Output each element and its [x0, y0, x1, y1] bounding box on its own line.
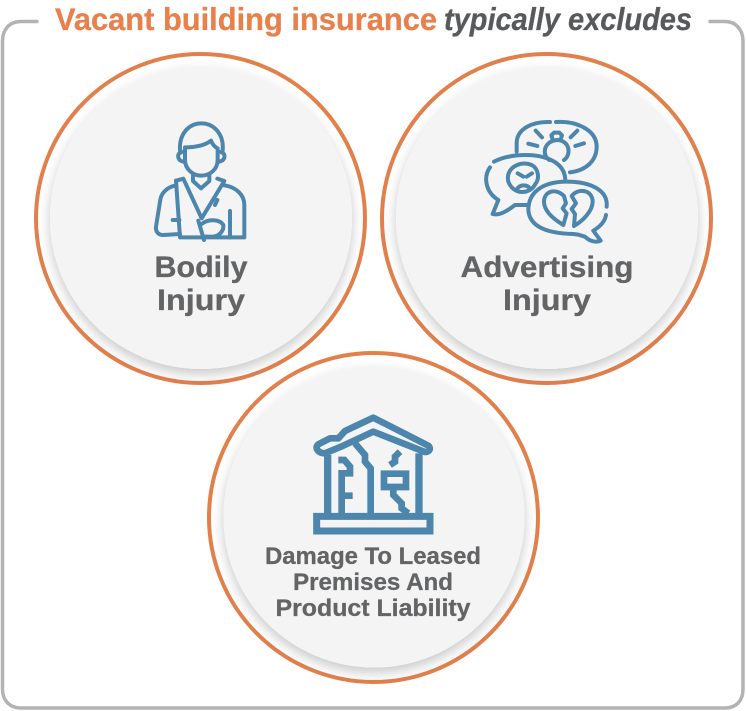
label: Damage To Leased Premises And Product Liability [265, 543, 481, 622]
outer ring [36, 54, 365, 383]
panel: advertising injury [382, 54, 711, 383]
title: Vacant building insurance [55, 1, 437, 37]
icon: speech bubbles with ring, angry face and broken heart [486, 122, 607, 242]
outer ring [382, 54, 711, 383]
outer ring [209, 353, 538, 682]
label: Damage To Leased Premises And Product Liability: Premises And [293, 569, 453, 596]
icon: cracked house [317, 418, 430, 531]
label: Bodily Injury [154, 251, 248, 317]
panel: bodily injury [36, 54, 365, 383]
icon: injured person with arm sling [156, 123, 244, 240]
label: Damage To Leased Premises And Product Liability: Damage To Leased [265, 543, 481, 570]
label: Advertising Injury: Advertising [460, 251, 634, 284]
label: Bodily Injury: Bodily [154, 251, 248, 284]
title: typically excludes [444, 1, 692, 37]
inner disc [224, 366, 524, 668]
label: Damage To Leased Premises And Product Liability: Product Liability [276, 595, 471, 622]
label: Advertising Injury: Injury [503, 284, 591, 317]
inner disc [396, 67, 698, 369]
label: Advertising Injury [460, 251, 634, 317]
panel: damage to leased premises and product liability [209, 353, 538, 682]
label: Bodily Injury: Injury [157, 284, 245, 317]
inner disc [50, 67, 352, 369]
title [55, 1, 692, 37]
